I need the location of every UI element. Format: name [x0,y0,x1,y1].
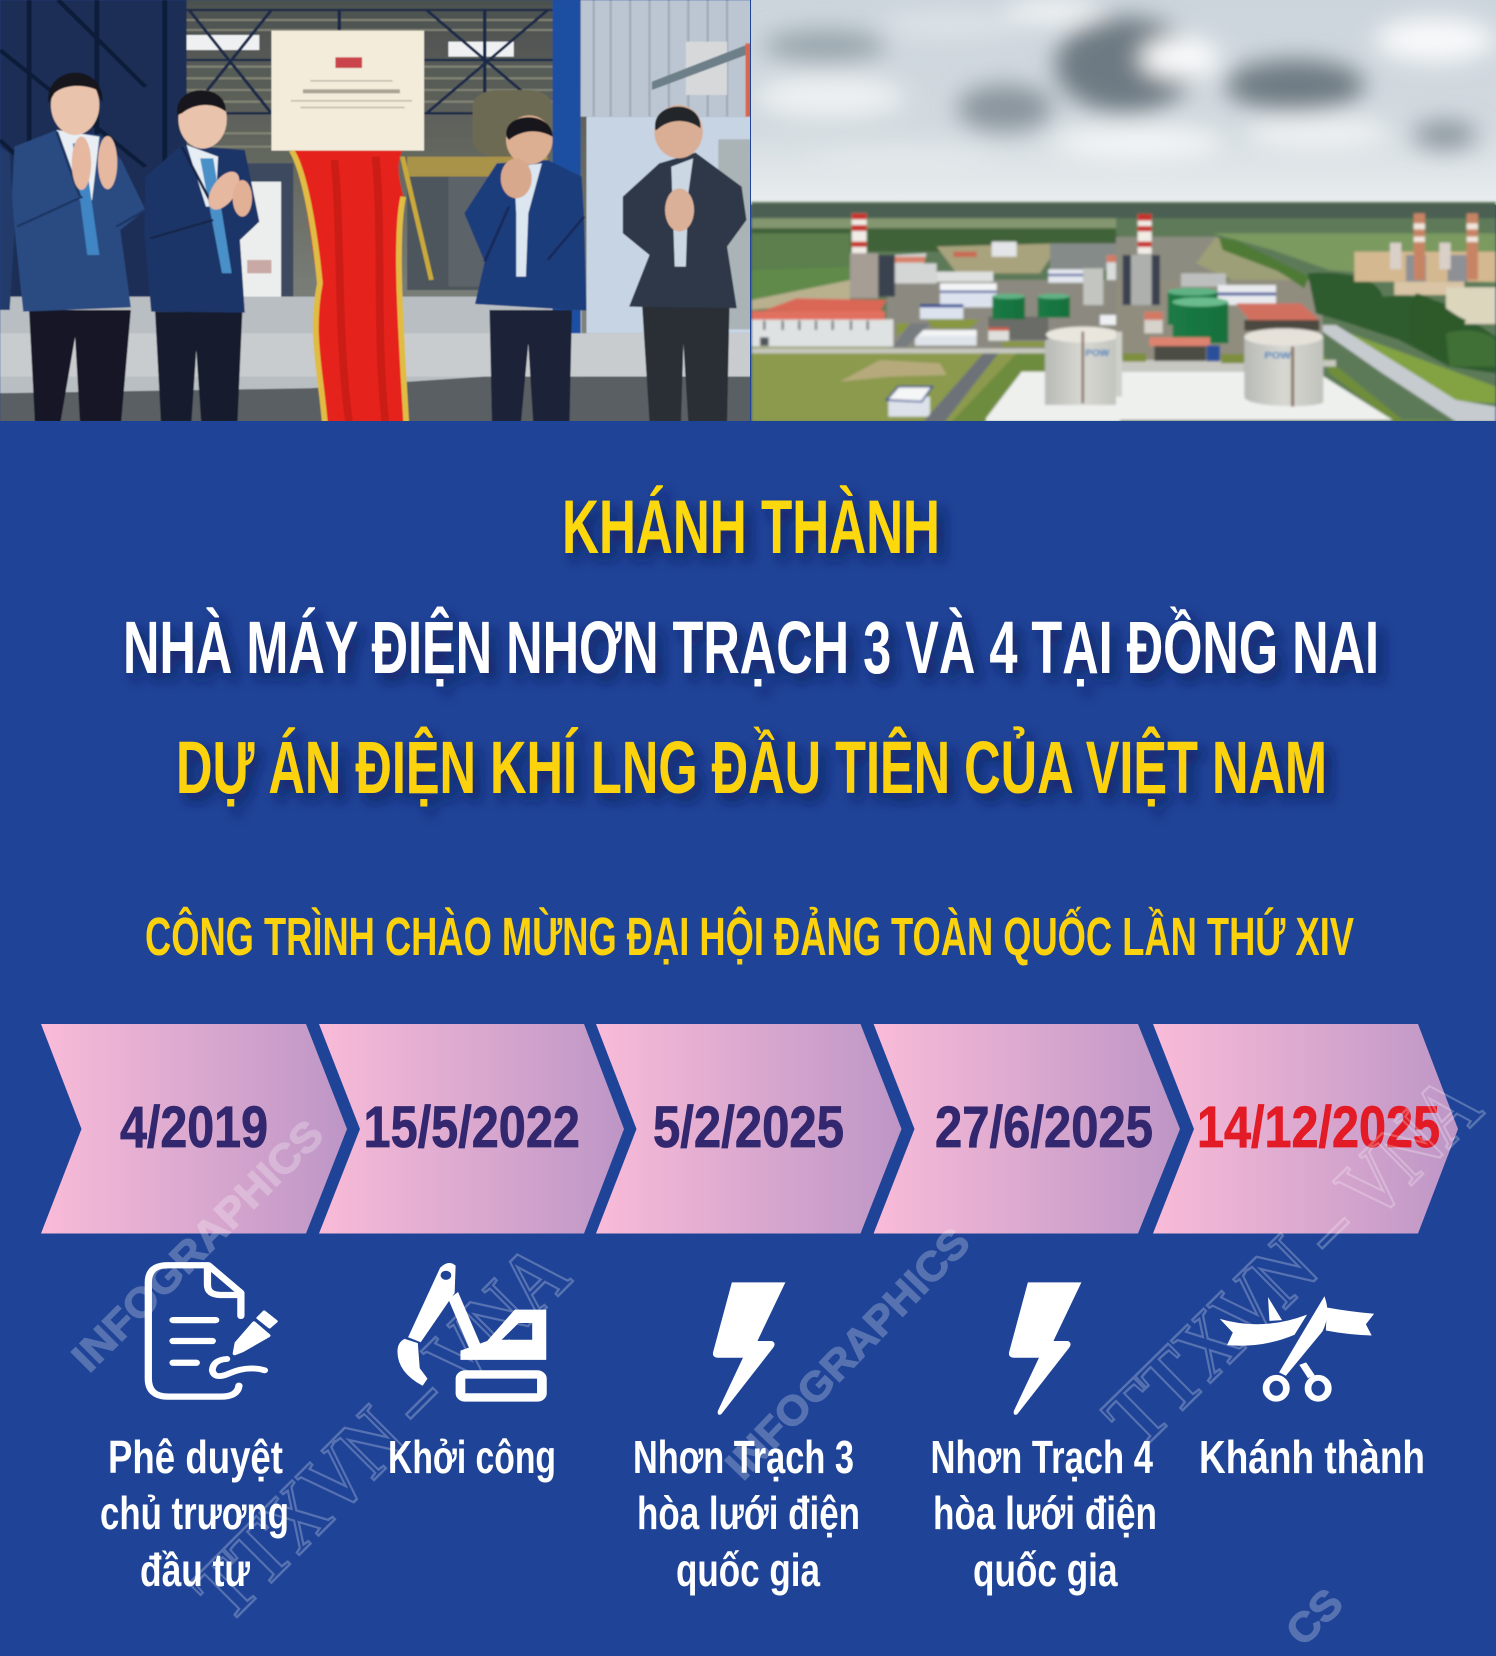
label: Nhơn Trạch 3 hòa lưới điện quốc gia: Nhơn Trạch 3 [633,1431,854,1483]
watermarks: INFOGRAPHICS [63,1111,332,1380]
icon: ribbon and scissors [1220,1296,1374,1399]
person 3 [464,115,586,422]
chevron: 14/12/2025: 14/12/2025 [1197,1095,1440,1160]
person 1 [12,73,145,422]
title line 1: KHÁNH THÀNH [562,485,940,570]
label: Phê duyệt chủ trương đầu tư: chủ trương [100,1487,289,1539]
stack 1 [850,213,895,298]
turbine hall, red roof [752,298,893,347]
label: Nhơn Trạch 3 hòa lưới điện quốc gia: quốc gia [676,1544,820,1596]
red curtain [292,151,406,422]
chevron: 15/5/2022 [319,1024,624,1234]
person 2 [144,90,259,422]
chevron: 14/12/2025 [1153,1024,1458,1234]
photo: inauguration ceremony with four officials and red-draped plaque [0,0,756,423]
plaque [271,31,424,151]
photo: aerial view of the power plant under a cloudy sky [751,0,1496,424]
label: Nhơn Trạch 3 hòa lưới điện quốc gia [633,1431,860,1596]
chevron: 15/5/2022: 15/5/2022 [364,1095,580,1160]
icon: lightning bolt, Nhơn Trạch 4 [1009,1282,1081,1415]
tank 2 [1116,328,1323,407]
label: Nhơn Trạch 4 hòa lưới điện quốc gia: hòa lưới điện [933,1487,1157,1539]
label: Khởi công: Khởi công [388,1431,556,1483]
watermarks [63,1058,1496,1654]
watermarks: INFOGRAPHICS [716,1219,979,1488]
road [923,353,998,422]
green tanks [992,294,1070,319]
far-left partial figure [0,147,15,310]
label: Phê duyệt chủ trương đầu tư: Phê duyệt [108,1431,283,1483]
chevron: 5/2/2025: 5/2/2025 [653,1095,844,1160]
tank 2: POW [1264,350,1291,360]
timeline chevrons [41,1024,1458,1234]
tank 1 [1045,327,1121,405]
blue-white block buildings [887,269,1120,417]
tank 1: POW [1085,348,1109,358]
watermarks: CS [1277,1579,1352,1654]
clouds [755,0,1495,179]
label: Phê duyệt chủ trương đầu tư [100,1431,289,1596]
red roof canopy [1149,303,1319,361]
chevron: 5/2/2025 [596,1024,902,1234]
concrete pad [986,372,1120,422]
chevron: 27/6/2025: 27/6/2025 [935,1095,1153,1160]
chevron: 4/2019: 4/2019 [120,1095,268,1160]
label: Nhơn Trạch 4 hòa lưới điện quốc gia: Nhơn Trạch 4 [930,1431,1153,1483]
label: Nhơn Trạch 3 hòa lưới điện quốc gia: hòa lưới điện [637,1487,860,1539]
watermarks: TTXVN – VNA [175,1226,588,1639]
far land [751,202,1496,424]
label: Nhơn Trạch 4 hòa lưới điện quốc gia: quốc gia [973,1544,1118,1596]
icon: document with pen [148,1265,276,1397]
label: Khánh thành: Khánh thành [1199,1431,1425,1483]
stack 2 [1123,214,1160,305]
green tanks [1168,288,1228,343]
chevron: 4/2019 [41,1024,347,1234]
tan power block and stacks [1354,213,1496,324]
label: Phê duyệt chủ trương đầu tư: đầu tư [140,1544,251,1596]
label: Nhơn Trạch 4 hòa lưới điện quốc gia [930,1431,1157,1596]
icon: lightning bolt, Nhơn Trạch 3 [713,1282,785,1415]
person 4 [623,105,746,422]
chevron: 27/6/2025 [874,1024,1180,1234]
icon: excavator [397,1263,546,1397]
concrete pad [1116,372,1393,420]
pipe rack building [1181,273,1226,287]
